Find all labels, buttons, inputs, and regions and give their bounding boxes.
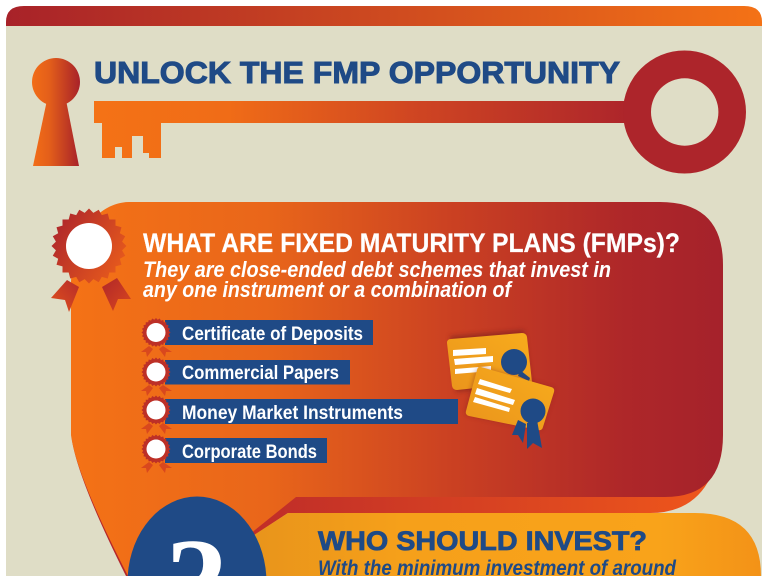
list item: money market instruments: Money Market Instruments (182, 402, 403, 424)
list item: corporate bonds: Corporate Bonds (182, 441, 317, 463)
list item: certificate of deposits: Certificate of Deposits (182, 323, 363, 345)
heading: what are FMPs: WHAT ARE FIXED MATURITY PLANS (FMPs)? (143, 228, 680, 258)
heading: who should invest: WHO SHOULD INVEST? (318, 526, 647, 556)
list item: corporate bonds (141, 434, 327, 473)
icon: keyhole (32, 58, 80, 166)
panel: what are FMPs (51, 202, 723, 576)
icon: key (94, 50, 746, 173)
icon: rosette badge (51, 208, 131, 312)
top gradient bar (6, 6, 762, 26)
intro text: They are close-ended debt schemes that invest in (143, 257, 611, 282)
intro text: any one instrument or a combination of (143, 277, 513, 302)
title: UNLOCK THE FMP OPPORTUNITY (94, 55, 620, 90)
intro text (143, 257, 611, 302)
list item: commercial papers: Commercial Papers (182, 362, 339, 384)
list item: certificate of deposits (141, 318, 373, 357)
list item: money market instruments (141, 396, 458, 434)
panel: who should invest (128, 497, 761, 576)
list item: commercial papers (141, 358, 350, 396)
icon: question mark circle (128, 497, 266, 576)
icon: certificates (447, 330, 554, 449)
